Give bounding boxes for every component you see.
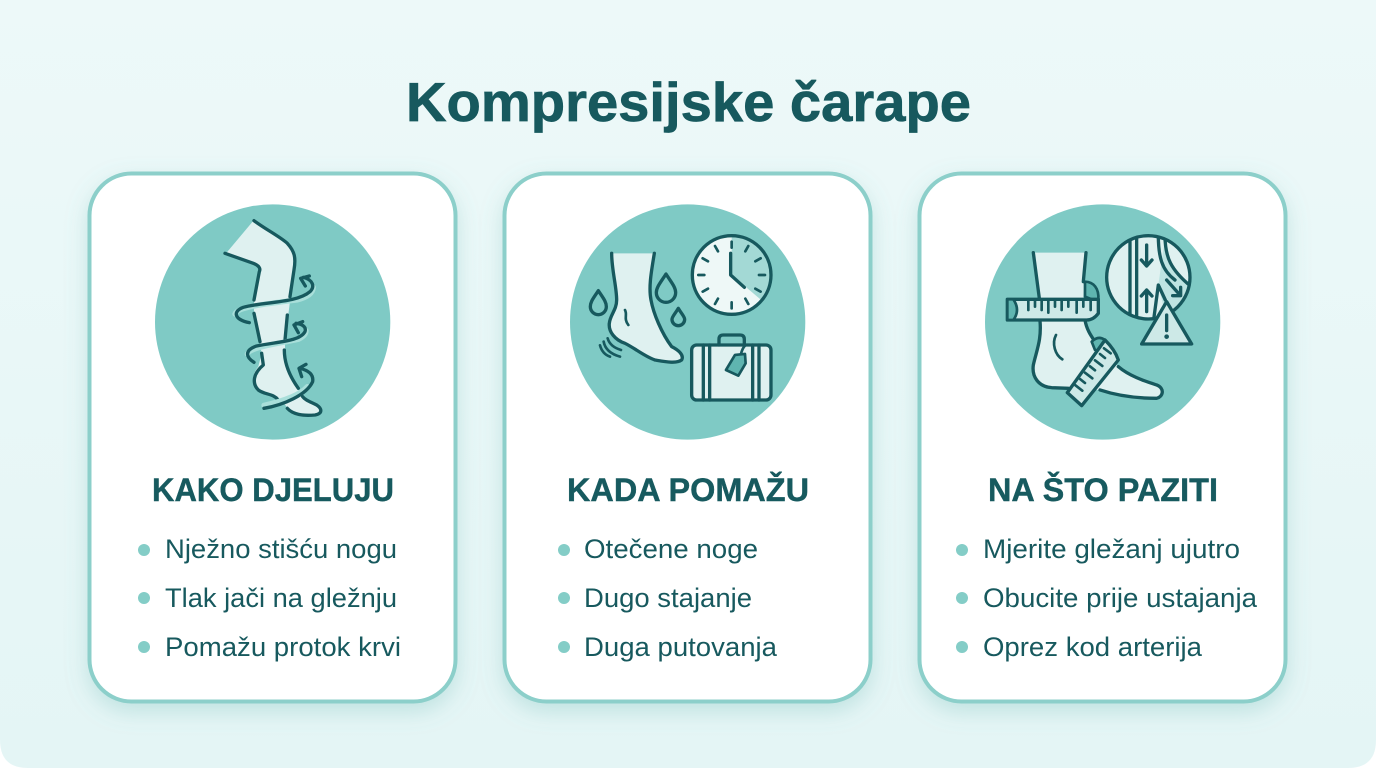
clock xyxy=(692,236,771,314)
list: Tlak jači na gležnju xyxy=(165,583,397,613)
list: Otečene noge xyxy=(584,534,758,564)
icon: leg with compression spirals xyxy=(155,204,390,440)
artery lens xyxy=(1107,235,1193,320)
ankle tape measure xyxy=(1007,282,1098,320)
foot xyxy=(1033,253,1162,398)
card background xyxy=(920,174,1286,702)
list xyxy=(138,534,401,662)
warning triangle xyxy=(1142,302,1192,344)
list: Oprez kod arterija xyxy=(983,632,1203,662)
title: Kompresijske čarape xyxy=(406,71,971,133)
list: Mjerite gležanj ujutro xyxy=(983,534,1240,564)
suitcase xyxy=(692,335,771,400)
icon: ankle measuring, artery warning xyxy=(985,204,1220,440)
list: Obucite prije ustajanja xyxy=(983,583,1258,613)
panel: kako djeluju xyxy=(90,174,456,702)
heading: KAKO DJELUJU xyxy=(152,472,394,508)
list xyxy=(558,534,778,662)
panel: kada pomažu xyxy=(504,174,870,702)
list: Nježno stišću nogu xyxy=(165,534,397,564)
panel: na što paziti xyxy=(920,174,1286,702)
icon: foot, clock, suitcase xyxy=(570,204,805,440)
card background xyxy=(90,174,456,702)
foot tape measure xyxy=(1067,338,1118,406)
list: Duga putovanja xyxy=(584,632,778,662)
list xyxy=(956,534,1258,662)
swollen foot xyxy=(600,253,682,362)
list: Dugo stajanje xyxy=(584,583,752,613)
list: Pomažu protok krvi xyxy=(165,632,401,662)
heading: KADA POMAŽU xyxy=(567,472,809,508)
card background xyxy=(504,174,870,702)
heading: NA ŠTO PAZITI xyxy=(988,472,1218,508)
water drops xyxy=(590,274,685,326)
